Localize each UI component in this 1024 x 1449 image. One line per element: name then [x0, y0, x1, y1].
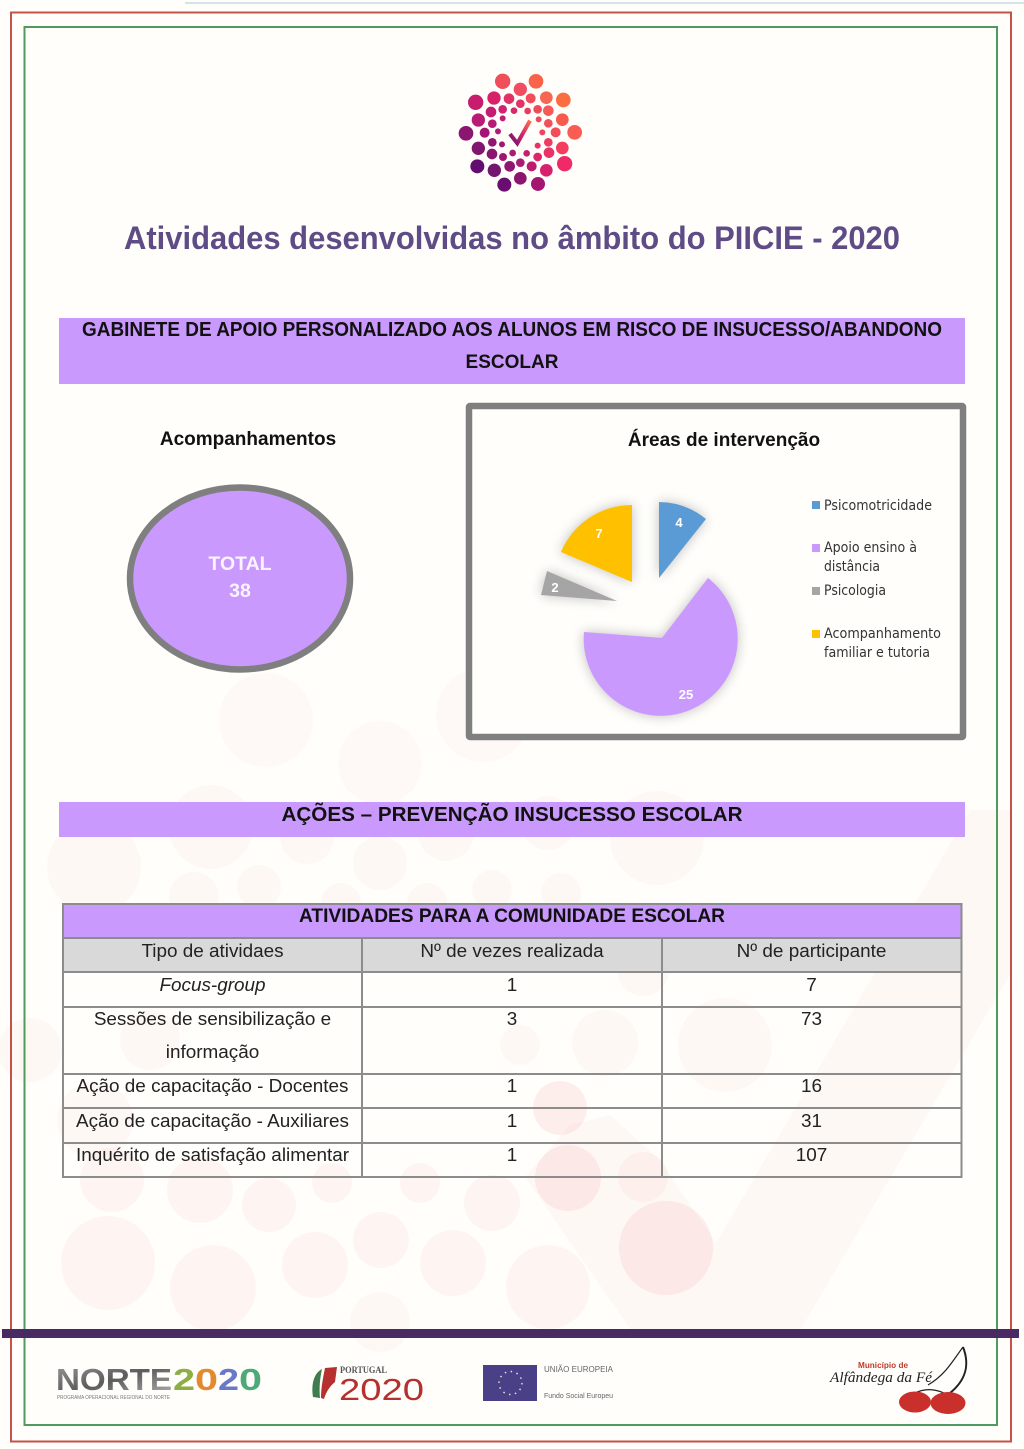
section banner: acoes [59, 802, 965, 837]
row: sessoes: 73 [801, 1009, 822, 1030]
panel: areas de intervencao [469, 406, 963, 737]
table title row: ATIVIDADES PARA A COMUNIDADE ESCOLAR [299, 906, 725, 927]
heading: areas de intervencao: Áreas de intervenção [628, 429, 820, 451]
footer bar [2, 1329, 1019, 1338]
section banner: gabinete de apoio: ESCOLAR [466, 352, 559, 373]
row: auxiliares: 31 [801, 1111, 822, 1132]
logo: norte 2020: NORTE [56, 1362, 172, 1397]
row: docentes: Ação de capacitação - Docentes [77, 1076, 348, 1097]
logo: norte 2020: 0 [195, 1362, 218, 1397]
table header row: Nº de vezes realizada [420, 941, 604, 962]
panel: acompanhamentos [130, 429, 350, 670]
background watermark [0, 668, 1011, 1352]
row: sessoes: Sessões de sensibilização e [94, 1009, 331, 1030]
legend [812, 498, 941, 661]
legend: distância [824, 559, 880, 575]
pie chart: 7 [595, 526, 603, 541]
row: docentes [77, 1076, 822, 1097]
logo: municipio de alfandega da fe: Alfândega da Fé [829, 1370, 933, 1386]
top edge line [185, 2, 1024, 4]
title: Atividades desenvolvidas no âmbito do PIICIE - 2020 [124, 220, 900, 256]
legend: Psicomotricidade [824, 498, 932, 514]
total ellipse: 38 [229, 580, 251, 602]
table header row: Nº de participante [737, 941, 886, 962]
row: docentes: 16 [801, 1076, 822, 1097]
section banner: acoes: AÇÕES – PREVENÇÃO INSUCESSO ESCOLAR [282, 802, 743, 826]
total ellipse [130, 488, 350, 670]
legend: familiar e tutoria [824, 645, 930, 661]
legend: Psicologia [824, 583, 886, 599]
pie chart: 25 [679, 687, 693, 702]
table title row [63, 904, 961, 938]
row: inquerito: 1 [507, 1145, 517, 1166]
logo: portugal 2020: PORTUGAL [340, 1366, 387, 1376]
logo: municipio de alfandega da fe: Município de [858, 1360, 908, 1370]
row: auxiliares: 1 [507, 1111, 517, 1132]
row: sessoes: 3 [507, 1009, 517, 1030]
row: inquerito: Inquérito de satisfação alimentar [76, 1145, 349, 1166]
logo: municipio de alfandega da fe [829, 1347, 966, 1414]
section banner: gabinete de apoio: GABINETE DE APOIO PERSONALIZADO AOS ALUNOS EM RISCO DE INSUCESSO/ABANDONO [82, 319, 942, 341]
row: focus-group: Focus-group [159, 975, 266, 996]
row: sessoes: informação [166, 1042, 259, 1063]
table: atividades para a comunidade escolar [63, 904, 962, 1177]
row: inquerito: 107 [796, 1145, 827, 1166]
pie chart [541, 502, 738, 716]
row: focus-group: 7 [806, 975, 817, 996]
pie chart: 2 [551, 580, 559, 595]
section banner: gabinete de apoio [59, 318, 965, 384]
logo: dotted circle with check mark [459, 74, 582, 192]
heading: acompanhamentos: Acompanhamentos [160, 429, 336, 450]
row: sessoes [94, 1009, 822, 1063]
row: inquerito [76, 1145, 827, 1166]
pie chart: 4 [675, 515, 683, 530]
logo: norte 2020: 0 [239, 1362, 262, 1397]
logo: uniao europeia [483, 1365, 614, 1401]
row: focus-group: 1 [507, 975, 517, 996]
row: auxiliares: Ação de capacitação - Auxiliares [76, 1111, 349, 1132]
logo: norte 2020 [56, 1362, 262, 1401]
legend: Acompanhamento [824, 626, 941, 642]
logo: uniao europeia: UNIÃO EUROPEIA [544, 1365, 614, 1374]
row: auxiliares [76, 1111, 822, 1132]
logo: portugal 2020 [312, 1366, 424, 1407]
row: focus-group [159, 975, 817, 996]
logo: uniao europeia: Fundo Social Europeu [544, 1391, 613, 1400]
logo: norte 2020: PROGRAMA OPERACIONAL REGIONAL DO NORTE [57, 1395, 170, 1401]
table header row [63, 938, 961, 972]
legend: Apoio ensino à [824, 540, 917, 556]
logo: norte 2020: 2 [173, 1362, 195, 1397]
row: docentes: 1 [507, 1076, 517, 1097]
table header row: Tipo de atividaes [141, 941, 284, 962]
logo: norte 2020: 2 [218, 1362, 239, 1397]
total ellipse: TOTAL [208, 553, 272, 575]
logo: portugal 2020: 2020 [339, 1372, 424, 1407]
